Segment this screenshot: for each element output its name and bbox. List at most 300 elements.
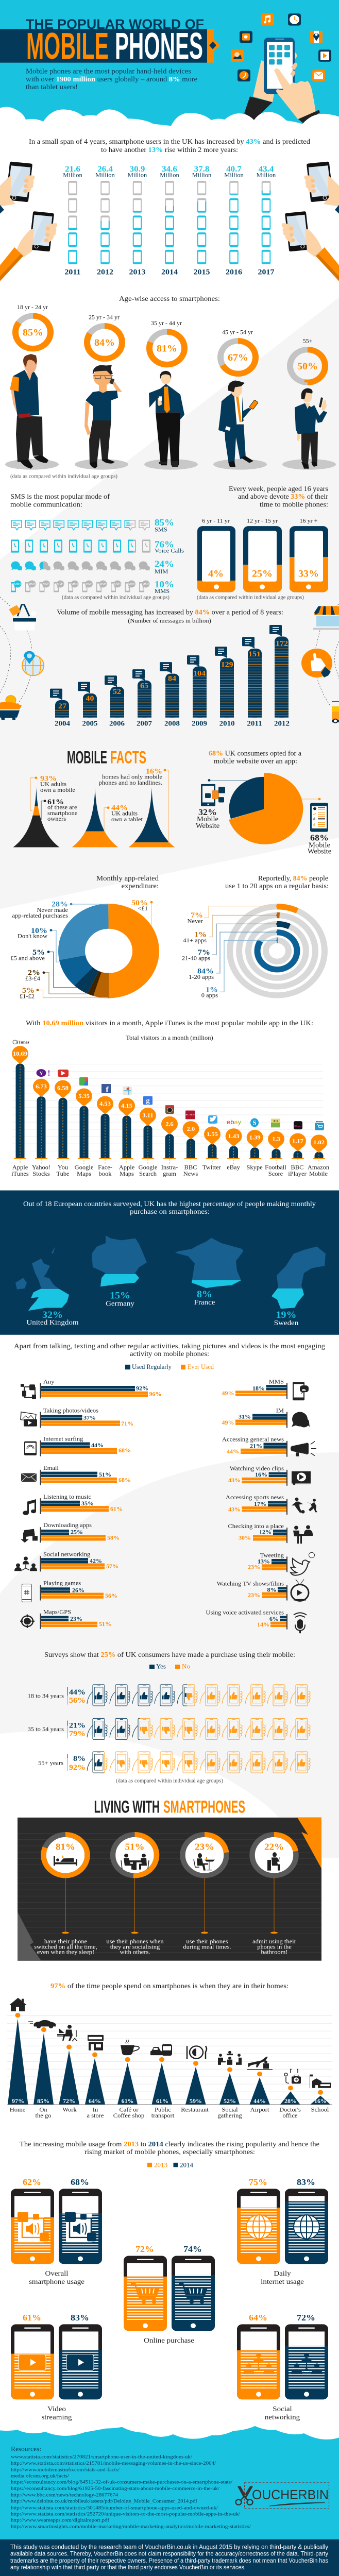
- icon: play navy: [66, 2354, 94, 2370]
- intro text: with over 1900 million users globally – around 8% more: [26, 76, 197, 83]
- text: resource links: www.statista.com/statistics/270821/smartphone-user-in-the-united-kingdom-uk/: [11, 2454, 192, 2460]
- million labels: Million: [128, 172, 147, 178]
- location labels: office: [283, 2112, 297, 2119]
- value labels: 30.9: [130, 164, 145, 174]
- bar: 2010: [215, 647, 235, 728]
- values: 59%: [190, 2098, 202, 2105]
- row: games: [41, 1580, 117, 1599]
- row: tweeting: Tweeting: [260, 1552, 284, 1558]
- row: downloading: Downloading apps: [43, 1522, 92, 1529]
- app names: Instra-: [161, 1164, 178, 1171]
- bar: 2004: 2004: [55, 720, 70, 728]
- row: tweeting: 13%: [258, 1558, 270, 1565]
- chart: apps used radial rings: 84%: [197, 967, 214, 976]
- chart: social networking: networking: [265, 2413, 300, 2421]
- chart: online purchase: 74%: [183, 2244, 202, 2254]
- chart: expenditure donut: [10, 899, 152, 999]
- chart: spike adults own a mobile: 93%: [40, 774, 57, 783]
- stat: in the bathroom: phones in the: [257, 1943, 292, 1950]
- text: resource links: http://www.bbc.com/news/technology-28677674: [11, 2493, 118, 2498]
- chart: spike homes without landline: [99, 767, 177, 848]
- text: resource links: http://www.deloitte.co.uk/mobileuk/assets/pdf/Deloitte_Mobile_Consumer_2014.pdf: [11, 2499, 198, 2504]
- stat: in the bathroom: [252, 1835, 296, 1955]
- heading: most popular app: With 10.69 million visitors in a month, Apple iTunes is the most popular mobile app in the UK:: [26, 1019, 313, 1027]
- panel: age group 45-54: 45 yr - 54 yr: [222, 329, 253, 336]
- chart: daily internet usage: Daily: [274, 2269, 291, 2278]
- logo: voucherbin: OUCHERBIN: [252, 2487, 329, 2502]
- heading: mobile facts: FACTS: [110, 748, 146, 767]
- app names: Tube: [56, 1170, 70, 1177]
- bar: 2004: [50, 689, 70, 728]
- row: news: 44%: [227, 1448, 239, 1455]
- background: grey diagonal panel: [0, 297, 339, 909]
- heading: app expenditure: [96, 875, 159, 890]
- panel: age group 18-24: 18 yr - 24 yr: [17, 304, 48, 311]
- row: games: 26%: [72, 1587, 84, 1594]
- icon: globe navy: [294, 2215, 319, 2239]
- chart: social networking: Social: [273, 2405, 292, 2413]
- row: checking: 30%: [239, 1535, 251, 1541]
- pins with values: 6.58: [57, 1084, 69, 1091]
- app names: book: [99, 1170, 112, 1177]
- chart: expenditure donut: 50%: [131, 899, 148, 907]
- bar: 2008: 2008: [164, 720, 180, 728]
- text: resource links: https://econsultancy.com/blog/64511-32-of-uk-consumers-make-purchases-on-a-smartphone-stats/: [11, 2480, 232, 2485]
- chart: daily internet usage: 75%: [249, 2177, 267, 2187]
- app names: Maps: [120, 1170, 134, 1177]
- chart: video streaming: Video: [47, 2405, 66, 2413]
- logo: voucherbin: [236, 2483, 329, 2509]
- year labels: 2017: [258, 268, 275, 276]
- panel: european purchases: [0, 1190, 339, 1335]
- row: taking photos: 71%: [121, 1420, 133, 1427]
- values: 52%: [224, 2098, 236, 2105]
- chart: purchase 18-34: 18 to 34 years: [28, 1692, 64, 1699]
- icon: play orange: [19, 2354, 46, 2370]
- row: internet surfing: [41, 1435, 131, 1454]
- bar: 2006: 52: [113, 687, 121, 696]
- heading: purchase using mobile: Surveys show that 25% of UK consumers have made a purchase using their mobile:: [44, 1651, 295, 1659]
- chart: spike homes without landline: phones and no landlines.: [99, 779, 162, 786]
- chart: spike homes without landline: homes had only mobile: [102, 773, 162, 781]
- chart: mobile website vs app pie: 68%: [310, 833, 329, 842]
- row: games: Playing games: [43, 1580, 81, 1586]
- icon: cart navy: [179, 2284, 208, 2304]
- chart: MIM row: MIM: [155, 568, 168, 575]
- bar: 2010: 2010: [219, 720, 235, 728]
- pins with values: 1.3: [272, 1136, 280, 1142]
- chart: apps used radial rings: 1%: [206, 986, 218, 994]
- row: maps: 23%: [70, 1616, 82, 1622]
- heading: time devoted to phones: [229, 485, 328, 509]
- value labels: 21.6: [65, 164, 80, 174]
- text: resource links: http://www.mobilemastinfo.com/stats-and-facts/: [11, 2467, 120, 2472]
- panel: age group 55+: 50%: [297, 361, 318, 372]
- chart: spike adults own a mobile: owners: [47, 815, 66, 822]
- app logos: !: [47, 1069, 50, 1078]
- chart: video streaming: [11, 2312, 102, 2421]
- chart: expenditure donut: 5%: [22, 987, 35, 995]
- legend: activities: Used Regularly: [132, 1364, 172, 1370]
- stat: during meal times: during meal times.: [183, 1943, 231, 1950]
- intro text: Mobile phones are the most popular hand-held devices: [26, 67, 191, 75]
- app logos: Y: [39, 1071, 43, 1076]
- heading: messaging volume: Volume of mobile messaging has increased by 84% over a period of 8 years:: [57, 608, 283, 616]
- chart: spike adults own a mobile: of these are: [47, 804, 77, 810]
- chart: spike homes without landline: 16%: [146, 767, 162, 775]
- million labels: Million: [95, 172, 115, 178]
- dots: [15, 2013, 323, 2095]
- chart: overall smartphone usage: Overall: [45, 2269, 68, 2278]
- chart: purchase 35-54: [28, 1718, 310, 1740]
- icon: hands holding phones left: [0, 161, 57, 281]
- bar: 2006: [105, 675, 125, 728]
- chart: spike adults own a mobile: smartphone: [47, 809, 77, 817]
- stat: while socialising: [106, 1835, 164, 1955]
- chart: daily internet usage: internet usage: [261, 2278, 304, 2286]
- app names: News: [183, 1170, 198, 1177]
- stat: phone on during sleep: switched on all the time,: [34, 1943, 97, 1950]
- chart: mobile website vs app pie: Website: [196, 822, 219, 830]
- chart: activities right column: [206, 1378, 287, 1630]
- bar: 2010: 129: [221, 660, 233, 669]
- stat: during meal times: 23%: [195, 1842, 214, 1852]
- map: united kingdom: 32%: [42, 1310, 63, 1320]
- app logos: 2:1: [273, 1120, 278, 1123]
- row: taking photos: [41, 1407, 133, 1427]
- bar: 2007: 65: [140, 682, 148, 690]
- icon: globe orange: [246, 2215, 272, 2239]
- heading: app expenditure: Monthly app-related: [96, 875, 159, 883]
- chart: purchase 35-54: 79%: [69, 1730, 86, 1738]
- row: music: [41, 1493, 123, 1512]
- stat: while socialising: use their phones when: [106, 1938, 164, 1945]
- row: tv: 23%: [248, 1592, 260, 1599]
- panel: age group 45-54: 67%: [228, 353, 248, 363]
- heading: smartphone users growth: [29, 138, 310, 154]
- chart: mobile website vs app pie: Mobile: [309, 841, 330, 849]
- row: news: 21%: [250, 1443, 262, 1450]
- bar: 2004: 27: [58, 702, 66, 710]
- chart: spike adults own a mobile: own a mobile: [40, 786, 75, 793]
- heading: age-wise access: Age-wise access to smartphones:: [119, 295, 220, 303]
- values: [12, 2098, 327, 2105]
- heading: european countries: Out of 18 European countries surveyed, UK has the highest percentage of people making monthly: [23, 1200, 316, 1208]
- values: 72%: [63, 2098, 75, 2105]
- bars: [15, 1063, 324, 1158]
- million labels: Million: [224, 172, 244, 178]
- row: voice: 6%: [269, 1616, 279, 1622]
- legend: activities: Ever Used: [188, 1364, 214, 1370]
- heading: 2013 vs 2014 usage: [20, 2140, 319, 2156]
- app logos: f: [106, 1084, 109, 1094]
- location labels: School: [311, 2106, 329, 2113]
- row: email: 68%: [118, 1477, 131, 1483]
- location labels: Home: [10, 2106, 25, 2113]
- map: sweden: 19%: [276, 1310, 296, 1320]
- value labels: 40.7: [226, 164, 242, 174]
- chart: voice calls row: 76%: [155, 539, 174, 549]
- app names: eBay: [227, 1164, 240, 1171]
- pins with values: 3.11: [142, 1112, 154, 1119]
- chart: spike adults own a mobile: UK adults: [40, 781, 66, 788]
- values: 44%: [253, 2098, 266, 2105]
- app names: Score: [268, 1170, 283, 1177]
- values: 61%: [156, 2098, 168, 2105]
- row: tv: Watching TV shows/films: [217, 1580, 284, 1587]
- intro text: [26, 67, 197, 91]
- row: maps: Maps/GPS: [43, 1608, 71, 1616]
- row: downloading: 58%: [107, 1535, 120, 1541]
- chart: social networking: 64%: [249, 2312, 267, 2323]
- values: 64%: [89, 2098, 101, 2105]
- chart: time by age, 16+: 33%: [298, 569, 319, 579]
- heading: resources: Resources:: [11, 2446, 41, 2452]
- heading: SMS most popular: [10, 493, 110, 509]
- location labels: Coffee shop: [113, 2112, 144, 2119]
- row: music: 35%: [81, 1500, 94, 1507]
- triangles: [8, 2019, 330, 2105]
- bar: 2008: [160, 662, 180, 728]
- map: germany: Germany: [106, 1300, 135, 1308]
- year labels: 2016: [226, 268, 242, 276]
- chart: voice calls row: Voice Calls: [155, 547, 184, 554]
- chart: apps used radial rings: 1%: [194, 930, 207, 939]
- heading: living with smartphones: LIVING WITH: [94, 1797, 160, 1817]
- heading: living with smartphones: SMARTPHONES: [163, 1797, 245, 1817]
- note: age groups: (data as compared within individual age groups): [10, 473, 117, 479]
- row: IM: IM: [276, 1407, 284, 1414]
- chart: purchase 35-54: 35 to 54 years: [28, 1726, 64, 1733]
- location labels: In: [93, 2106, 98, 2113]
- row: maps: 51%: [99, 1621, 111, 1628]
- heading: smartphone users growth: to have another 13% rise within 2 more years:: [101, 146, 238, 154]
- year labels: 2011: [64, 268, 81, 276]
- text: resource links: [11, 2454, 251, 2530]
- text: resource links: http://www.statista.com/statistics/301485/number-of-smartphone-apps-used-and-owned-uk/: [11, 2505, 218, 2511]
- chart: purchase 18-34: 56%: [69, 1696, 86, 1705]
- panel: age group 25-34: [75, 314, 128, 470]
- row: video: 16%: [255, 1471, 267, 1478]
- text: resource links: media.ofcom.org.uk/facts/: [11, 2473, 69, 2479]
- icon: people network navy: [291, 2353, 323, 2374]
- row: email: Email: [43, 1464, 59, 1471]
- icon: mobile website phone: $: [313, 823, 315, 827]
- stat: phone on during sleep: 81%: [56, 1842, 75, 1852]
- values: 61%: [122, 2098, 134, 2105]
- chart: MMS row: 10%: [155, 580, 174, 589]
- chart: spike adults own a mobile: 61%: [47, 798, 64, 806]
- text: resource links: http://www.statista.com/statistics/252720/unique-visitors-to-the-most-popular-mobile-apps-in-the-uk/: [11, 2512, 240, 2517]
- heading: most popular app: [26, 1019, 313, 1041]
- bar: 2008: 84: [168, 674, 176, 683]
- app names: Search: [139, 1170, 157, 1177]
- chart: expenditure donut: 5%: [32, 948, 45, 957]
- chart: spike adults own a tablet: 44%: [111, 804, 128, 812]
- chart: SMS row: 85%: [155, 518, 174, 528]
- row: tv: 8%: [267, 1587, 277, 1594]
- row: IM: 31%: [239, 1414, 251, 1420]
- title banner: PHONES: [115, 25, 203, 67]
- value labels: 37.8: [194, 164, 209, 174]
- chart: overall smartphone usage: 62%: [23, 2177, 41, 2187]
- map: sweden: Sweden: [274, 1319, 299, 1327]
- million labels: Million: [192, 172, 211, 178]
- million labels: Million: [160, 172, 179, 178]
- pins with values: 5.35: [78, 1093, 90, 1099]
- pins with values: 1.02: [313, 1139, 325, 1146]
- app logos: ebay: [227, 1118, 242, 1126]
- row: taking photos: 37%: [83, 1415, 96, 1421]
- row: checking: 12%: [259, 1529, 272, 1535]
- row: internet surfing: 44%: [91, 1442, 104, 1449]
- heading: european countries: [23, 1200, 316, 1216]
- pins with values: 6.73: [36, 1083, 47, 1090]
- row: internet surfing: 68%: [118, 1448, 131, 1454]
- chart: mobile website vs app pie: Mobile: [197, 815, 218, 823]
- heading: website over app: mobile website over an app:: [214, 757, 297, 766]
- stat: phone on during sleep: have their phone: [44, 1938, 87, 1945]
- chart: smartphone users by year: [63, 164, 276, 276]
- year labels: 2013: [129, 268, 146, 276]
- location labels: Restaurant: [181, 2106, 209, 2113]
- bar: 2005: 40: [86, 694, 94, 703]
- stat: phone on during sleep: [34, 1835, 97, 1955]
- app names: Yahoo!: [32, 1164, 50, 1171]
- bar: 2009: [187, 655, 207, 728]
- row: internet surfing: Internet surfing: [43, 1435, 83, 1443]
- chart: time by age, 12-15: [243, 518, 282, 592]
- stat: during meal times: [182, 1835, 231, 1950]
- bar: 2012: [269, 625, 290, 728]
- heading: apps used: Reportedly, 84% people: [258, 875, 328, 883]
- pins with values: [12, 1046, 327, 1153]
- year labels: 2012: [97, 268, 113, 276]
- row: MMS: 18%: [252, 1385, 265, 1392]
- chart: spike adults own a tablet: [70, 787, 143, 848]
- bar: 2005: 2005: [82, 720, 97, 728]
- text: resource links: https://econsultancy.com/blog/61925-50-fascinating-stats-about-mobile-commerce-in-the-uk/: [11, 2486, 219, 2492]
- stat: while socialising: with others.: [120, 1948, 150, 1955]
- title line: the popular world of: THE POPULAR WORLD OF: [26, 16, 204, 32]
- heading: 2013 vs 2014 usage: rising market of mobile phones, especially smartphones:: [84, 2148, 255, 2156]
- chart: purchase 55+: 92%: [69, 1763, 86, 1772]
- year labels: 2015: [194, 268, 210, 276]
- chart: expenditure donut: app-related purchases: [12, 912, 68, 919]
- map: germany: [92, 1235, 147, 1308]
- bar: 2011: 151: [248, 650, 261, 658]
- chart: app visitors: [11, 1040, 329, 1177]
- stat: while socialising: 51%: [125, 1842, 144, 1852]
- chart: overall smartphone usage: 68%: [71, 2177, 89, 2187]
- year labels: [64, 268, 275, 276]
- pins with values: 4.53: [99, 1100, 111, 1107]
- chart: social networking: 72%: [297, 2312, 315, 2323]
- heading: engaging activities: Apart from talking, texting and other regular activities, taking pictures and videos is the most engaging: [14, 1342, 325, 1350]
- panel: hero header: [0, 0, 339, 130]
- stat: in the bathroom: admit using their: [252, 1938, 296, 1945]
- chart: apps used radial rings: 7%: [191, 911, 203, 920]
- heading: messaging volume: (Number of messages in billion): [128, 617, 211, 624]
- chart: mobile website vs app pie: [196, 773, 331, 856]
- row: IM: [222, 1407, 286, 1426]
- row: checking: Checking into a place: [228, 1522, 284, 1530]
- icon: phone with app squares: [201, 784, 225, 806]
- chart: voice calls row: [11, 539, 184, 554]
- chart: video streaming: 83%: [71, 2312, 89, 2323]
- chart: SMS row: [11, 518, 174, 533]
- bar: 2012: 172: [276, 639, 288, 648]
- heading: apps used: [225, 875, 329, 890]
- heading: SMS most popular: SMS is the most popular mode of: [10, 493, 110, 501]
- legend: activities: [125, 1364, 214, 1370]
- chart: expenditure donut: <£1: [138, 905, 148, 912]
- chart: daily internet usage: 83%: [297, 2177, 315, 2187]
- location labels: a store: [87, 2112, 104, 2119]
- heading: 2013 vs 2014 usage: The increasing mobile usage from 2013 to 2014 clearly indicates the rising popularity and hence the: [20, 2140, 319, 2148]
- chart: mobile website vs app pie: Website: [308, 848, 331, 856]
- row: social: Social networking: [43, 1551, 90, 1557]
- million labels: Million: [257, 172, 276, 178]
- decoration: commerce icons left: [0, 597, 44, 720]
- legend: years: [147, 2162, 194, 2168]
- heading: website over app: [209, 750, 302, 766]
- panel: age group 18-24: [5, 304, 59, 470]
- app names: Stocks: [32, 1170, 50, 1177]
- chart: apps used radial rings: 0 apps: [201, 992, 218, 999]
- stat: while socialising: they are socialising: [110, 1943, 160, 1950]
- icon: hands holding phone: [244, 38, 320, 124]
- chart: online purchase: 72%: [135, 2244, 154, 2254]
- heading: website over app: 68% UK consumers opted for a: [209, 750, 302, 758]
- chart: activities left column: [40, 1378, 161, 1629]
- row: social: [41, 1551, 118, 1570]
- map: united kingdom: United Kingdom: [26, 1319, 79, 1327]
- row: downloading: [41, 1522, 120, 1541]
- map: france: 8%: [197, 1289, 212, 1300]
- note: purchases: (data as compared within individual age groups): [116, 1778, 223, 1784]
- location labels: On: [39, 2106, 47, 2113]
- row: any: Any: [43, 1378, 55, 1385]
- chart: purchase 18-34: 44%: [69, 1688, 86, 1697]
- chart: time by age, 6-11: 6 yr - 11 yr: [202, 518, 230, 524]
- chart: mobile website vs app pie: 32%: [198, 807, 217, 817]
- text: resource links: http://www.weareapps.com/digitalreport.pdf: [11, 2518, 110, 2523]
- panel: disclaimer: any relationship with that third party or that the third party endorses VoucherBin or its services.: [10, 2564, 246, 2571]
- chart: expenditure donut: £3-£4: [25, 975, 40, 982]
- bar: 2011: [242, 637, 262, 728]
- map: sweden: [272, 1247, 326, 1327]
- app names: You: [58, 1164, 68, 1171]
- heading: apps used: use 1 to 20 apps on a regular basis:: [225, 882, 329, 890]
- icon: hands holding phones right: [282, 161, 339, 281]
- app logos: S: [252, 1120, 257, 1127]
- app names: [11, 1164, 329, 1177]
- text: resource links: http://www.smartinsights.com/mobile-marketing/mobile-marketing-analytics/mobile-marketing-statistics/: [11, 2524, 251, 2530]
- icon: cart orange: [131, 2284, 160, 2304]
- chart: apps used radial rings: 21-40 apps: [182, 955, 210, 961]
- row: MMS: 49%: [222, 1390, 234, 1397]
- chart: purchase 55+: 55+ years: [38, 1759, 63, 1767]
- row: MMS: [222, 1378, 286, 1397]
- legend: yes/no: Yes: [156, 1663, 166, 1670]
- row: video: Watching video clips: [230, 1465, 284, 1472]
- bar: 2007: 2007: [137, 720, 152, 728]
- app names: Football: [265, 1164, 286, 1171]
- app names: Apple: [12, 1164, 28, 1171]
- bar: 2012: 2012: [274, 720, 290, 728]
- row: sports: [226, 1494, 286, 1513]
